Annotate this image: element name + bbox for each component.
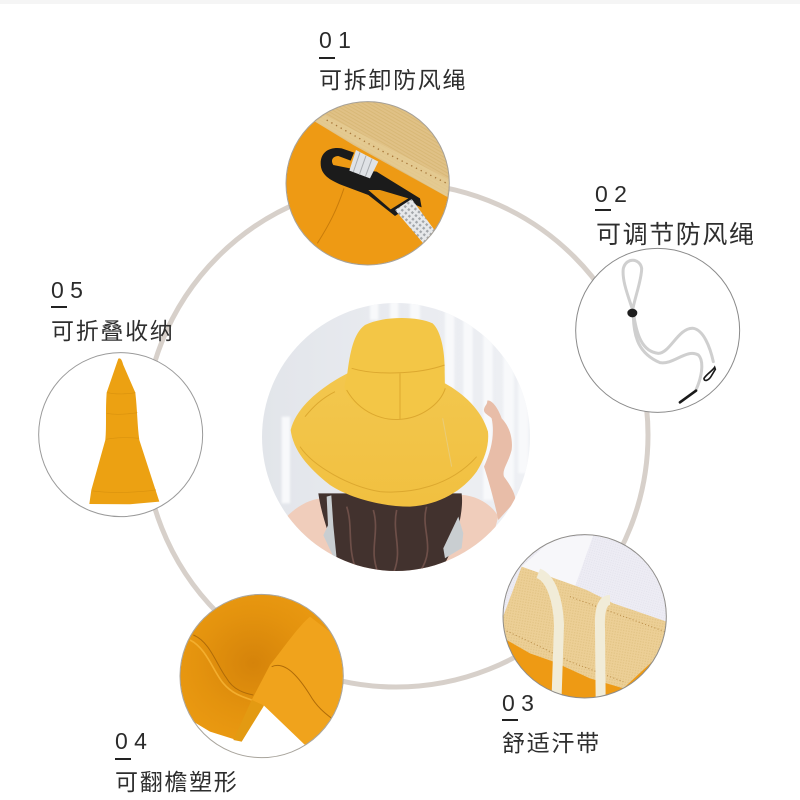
detail photo: clip on hat	[280, 100, 453, 267]
label 04: 可翻檐塑形	[115, 769, 238, 795]
fold shadow	[233, 700, 264, 742]
label 05: 可折叠收纳	[51, 318, 174, 344]
detail photo: folded hat	[39, 353, 203, 517]
frayed edge	[315, 115, 450, 197]
folded brim flap	[252, 617, 347, 745]
detail photo: inner band	[500, 532, 670, 702]
panel 03: comfortable sweatband	[500, 532, 670, 756]
label 03: 0 3	[502, 690, 534, 716]
dress straps	[323, 495, 463, 559]
detail photo: cord	[576, 248, 740, 412]
label 01: 可拆卸防风绳	[319, 67, 467, 93]
label 02: 0 2	[595, 181, 627, 207]
white cord coil	[349, 150, 378, 178]
woman's back	[287, 495, 498, 572]
tan hat band	[315, 100, 453, 197]
top strip	[0, 0, 800, 4]
underside fabric	[180, 594, 331, 742]
slider bead	[627, 309, 637, 317]
panel 02: adjustable windproof cord	[576, 181, 756, 412]
tan sweatband	[500, 567, 667, 688]
mesh lining	[504, 535, 666, 622]
label 04	[115, 728, 238, 795]
stitching	[507, 631, 623, 682]
panel 01: removable windproof cord	[280, 27, 467, 267]
panel 04: reversible shapeable brim	[115, 585, 347, 795]
label 02: 可调节防风绳	[596, 221, 756, 249]
black end clip	[704, 367, 715, 380]
brim stitching	[193, 635, 332, 718]
label 03	[502, 690, 601, 756]
clip opening	[368, 190, 408, 209]
stitch ridge	[190, 640, 252, 700]
label 05: 0 5	[51, 277, 83, 303]
hat crown	[347, 318, 445, 384]
label 01: 0 1	[319, 27, 351, 53]
hair highlights	[347, 507, 428, 573]
orange lining	[280, 100, 453, 267]
connecting ring	[144, 183, 648, 687]
detail photo: folded brim	[177, 585, 347, 758]
label 01	[319, 27, 467, 93]
panel: centre photo of woman in yellow hat	[260, 300, 532, 573]
label 04: 0 4	[115, 728, 147, 754]
black clip	[321, 148, 422, 216]
folded orange hat	[89, 358, 159, 504]
hat stitching	[300, 365, 477, 492]
photo background	[262, 303, 530, 526]
fold lines	[93, 393, 156, 492]
yellow hat	[291, 318, 488, 507]
panel 05: foldable for storage	[39, 277, 203, 517]
ribbons	[538, 573, 610, 698]
raised hand	[484, 401, 515, 520]
label 05	[51, 277, 174, 344]
black end hook	[680, 391, 696, 402]
hair	[318, 493, 462, 573]
label 03: 舒适汗带	[502, 730, 601, 756]
silver crimp	[395, 199, 436, 243]
hat brim	[291, 373, 488, 507]
cord loop and strands	[623, 260, 713, 390]
seam	[317, 188, 344, 243]
orange under-brim	[507, 640, 652, 698]
label 02	[595, 181, 756, 249]
